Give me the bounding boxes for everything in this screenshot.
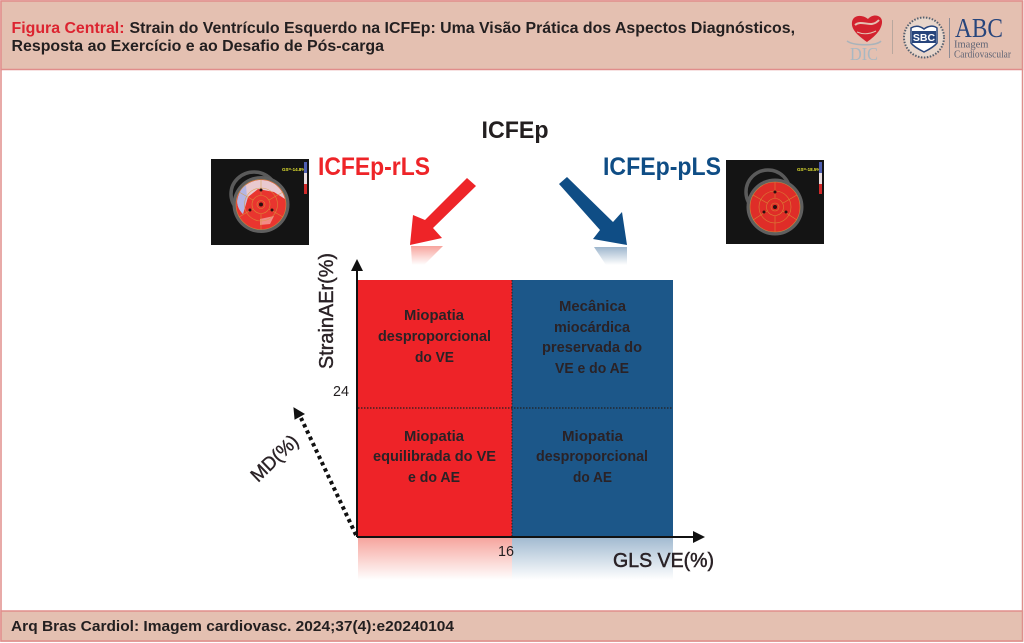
quadrant text: top right [542,298,642,377]
quadrant text: bottom right: do AE [573,469,612,486]
arrow: blue [559,177,627,265]
MD axis [294,408,356,535]
label: ICFEp-pLS: ICFEp-pLS [603,153,721,181]
quadrant text: top right: Mecânica [559,298,627,315]
x axis [357,531,705,543]
chart quadrants [358,280,673,537]
quadrant: blue [512,280,673,537]
logo: ABC Imagem Cardiovascular: ABC [955,13,1003,43]
title [12,20,795,55]
divider [892,20,893,54]
title: Resposta ao Exercício e ao Desafio de Pós-carga [12,38,384,55]
quadrant text: top left: do VE [415,349,454,366]
footer band [1,611,1022,641]
y axis label: StrainAEr(%) [315,253,338,369]
logo: SBC: SBC [913,32,936,44]
quadrant text: top left: Miopatia [404,307,465,324]
title: Strain do Ventrículo Esquerdo na ICFEp: Uma Visão Prática dos Aspectos Diagnósticos, [130,20,795,37]
x threshold: 16 [498,543,514,560]
header band [1,1,1022,70]
MD label: MD(%) [247,431,303,487]
label: ICFEp-rLS: ICFEp-rLS [318,153,430,181]
logo: ABC Imagem Cardiovascular: Cardiovascular [954,50,1011,60]
x axis label: GLS VE(%) [613,549,714,572]
bullseye: left: GS=-14.8% [282,167,305,172]
bullseye: left [211,159,309,245]
chart reflection [358,538,512,580]
title: Figura Central: [12,20,124,37]
arrow: red [410,178,476,265]
quadrant text: top right: miocárdica [554,319,631,336]
logo: ABC Imagem Cardiovascular: Imagem [954,40,988,50]
bullseye: right: GS=-18.5% [797,167,820,172]
quadrant text: top right: VE e do AE [555,360,629,377]
logo: DIC: DIC [850,44,878,64]
bullseye: right [726,160,824,244]
quadrant text: top right: preservada do [542,339,642,356]
quadrant text: top left: desproporcional [378,328,491,345]
quadrant text: bottom left: equilibrada do VE [373,448,496,465]
quadrant text: bottom right: Miopatia [562,428,624,445]
divider [949,18,950,58]
quadrant text: bottom right: desproporcional [536,448,648,465]
logo: ABC Imagem Cardiovascular [954,13,1011,60]
y axis [351,259,363,537]
y threshold: 24 [333,383,349,400]
citation: Arq Bras Cardiol: Imagem cardiovasc. 2024;37(4):e20240104 [11,619,454,635]
quadrant text: bottom left [373,428,496,486]
logo: SBC [904,18,944,58]
quadrant text: bottom right [536,428,648,486]
quadrant text: top left [378,307,491,366]
logo: DIC [847,16,882,64]
quadrant: red [358,280,512,537]
main heading: ICFEp [482,117,548,144]
quadrant text: bottom left: Miopatia [404,428,465,445]
quadrant text: bottom left: e do AE [408,469,460,486]
